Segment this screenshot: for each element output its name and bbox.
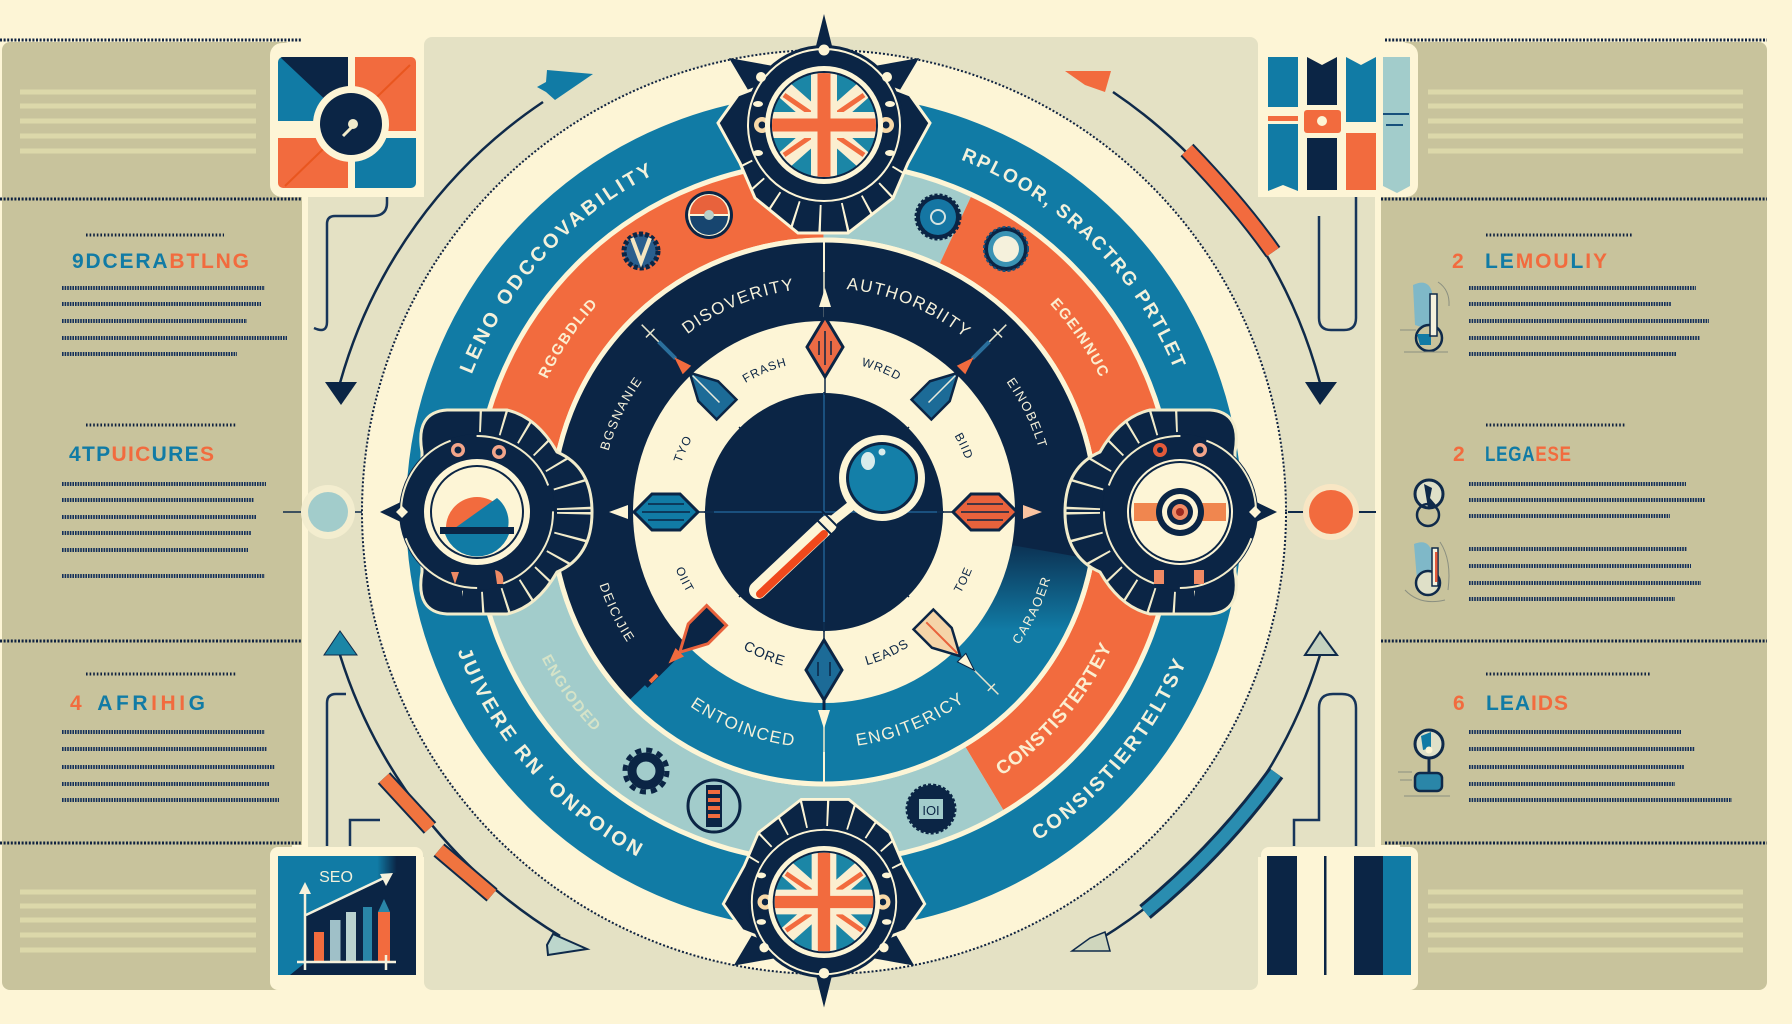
arrow: bottom-right curve with blue pipe: [1072, 632, 1337, 951]
arrow: bottom-left curve with orange pipes: [324, 631, 587, 955]
ring labels: outer blue band: JUIVERE RN 'ONPOION: [458, 650, 643, 856]
ring labels: middle band: CONSTISTERTEY: [996, 642, 1110, 774]
ring: middle segments: [512, 200, 1136, 824]
ring labels: inner cream band: LEADS: [865, 640, 908, 665]
center disc: [705, 393, 943, 631]
pointer: top-right: [912, 315, 1016, 419]
ring labels: inner cream band: [673, 358, 972, 666]
icon: globe 2: [1415, 480, 1443, 526]
ring labels: middle band: RGGBDLID: [538, 300, 596, 378]
arrow: top-right curve with orange pipe: [1065, 71, 1337, 405]
side marker: left teal circle: [283, 485, 424, 539]
text block: left 2: [62, 425, 266, 576]
text block: right 2: 2: [1453, 443, 1465, 466]
ring labels: navy band: ENTOINCED: [691, 697, 794, 746]
icon: navy badge: IOI: [922, 803, 940, 818]
icon: ring badge: [984, 227, 1028, 271]
icon: blue gear badge: [916, 195, 960, 239]
icon box: top-right ribbon tile: [1261, 43, 1418, 197]
background panel: central compass area: [308, 37, 1375, 990]
ring: inner navy and blue band: [593, 281, 1055, 743]
ring labels: navy band: DEICIJIE: [600, 582, 634, 642]
pointer: left: [609, 494, 714, 530]
label: SEO: SEO: [319, 869, 353, 886]
connector lines: [314, 197, 1356, 846]
text block: right 3: [1453, 674, 1732, 800]
icon: gear shield: [624, 234, 658, 268]
ring labels: navy band: DISOVERITY: [682, 278, 792, 334]
medallion: right target: [1065, 407, 1285, 617]
ring labels: middle band: EGEINNUC: [1050, 298, 1108, 376]
ring labels: navy band: CARAOER: [1013, 578, 1050, 643]
icon: lollipop globe 4: [1398, 730, 1450, 796]
side marker: right orange circle: [1288, 484, 1376, 540]
icon: navy gear: [625, 750, 667, 792]
pointer spokes: [704, 392, 944, 632]
ring labels: outer blue band: [458, 148, 1186, 856]
ring labels: inner cream band: FRASH: [742, 358, 786, 382]
text block: right 1: LEMOULIY: [1485, 250, 1607, 273]
text block: right 3: 6: [1453, 692, 1465, 715]
icon: magnifying glass: [758, 435, 925, 594]
text block: left 1: [62, 235, 287, 354]
icon: thermometer 3: [1405, 542, 1449, 602]
ring labels: navy band: BGSNANIE: [600, 377, 642, 450]
text block: left 3: 4 AFRIHIG: [70, 692, 205, 715]
text block: right 1: [1452, 235, 1709, 354]
ring labels: navy band: [600, 278, 1050, 746]
icon: navy badge: [907, 785, 955, 833]
medallion: left dome: [372, 407, 592, 617]
text block: left 1: 9DCERABTLNG: [72, 250, 249, 273]
icon box: bottom-right bars tile: [1261, 847, 1418, 990]
ring labels: inner cream band: WRED: [864, 358, 900, 379]
pointer: top: [807, 288, 843, 395]
text block: left 2: 4TPUICURES: [69, 443, 214, 466]
ring labels: navy band: AUTHORBIITY: [846, 278, 972, 334]
pointer: bottom-left: [636, 606, 726, 696]
icon: striped dial: [688, 780, 740, 832]
ring labels: middle band: [538, 298, 1110, 774]
panel: right column: [1381, 40, 1767, 990]
icon: thermometer 1: [1400, 282, 1449, 352]
ring labels: inner cream band: TOE: [954, 567, 972, 591]
ring labels: outer blue band: RPLOOR, SRACTRG PRTLET: [962, 148, 1186, 365]
icon box: top-left key tile: [270, 43, 423, 197]
pointer: bottom-right: [914, 610, 1008, 704]
ring labels: navy band: EINOBELT: [1006, 378, 1048, 446]
arrow: top-left curve: [325, 70, 593, 405]
text block: right 3: LEAIDS: [1486, 692, 1568, 715]
pointer: bottom: [806, 622, 842, 729]
pointer: top-left: [632, 315, 736, 419]
ring labels: outer blue band: LENO ODCCOVABILITY: [459, 162, 649, 374]
ring labels: navy band: ENGITERICY: [856, 692, 961, 746]
ring labels: inner cream band: BIID: [954, 432, 972, 458]
ring labels: inner cream band: OIIT: [676, 567, 694, 590]
ring labels: inner cream band: TYO: [673, 436, 690, 460]
compass wheel: [361, 50, 1287, 974]
ring labels: middle band: ENGIODED: [542, 654, 600, 730]
ring labels: inner cream band: CORE: [744, 642, 785, 666]
text block: right 2: [1453, 425, 1705, 599]
text block: left 3: [62, 674, 279, 800]
text block: right 2: LEGAESE: [1485, 443, 1571, 467]
medallion: top flag: [718, 14, 930, 233]
text block: right 1: 2: [1452, 250, 1464, 273]
pointer: right: [937, 494, 1042, 530]
medallion: bottom flag: [723, 799, 925, 1007]
ring labels: outer blue band: CONSISTIERTELTSY: [1032, 658, 1184, 838]
icon box: SEO bar chart tile: [270, 847, 423, 990]
icon: disc: [685, 191, 733, 239]
panel: left column: [0, 40, 302, 990]
